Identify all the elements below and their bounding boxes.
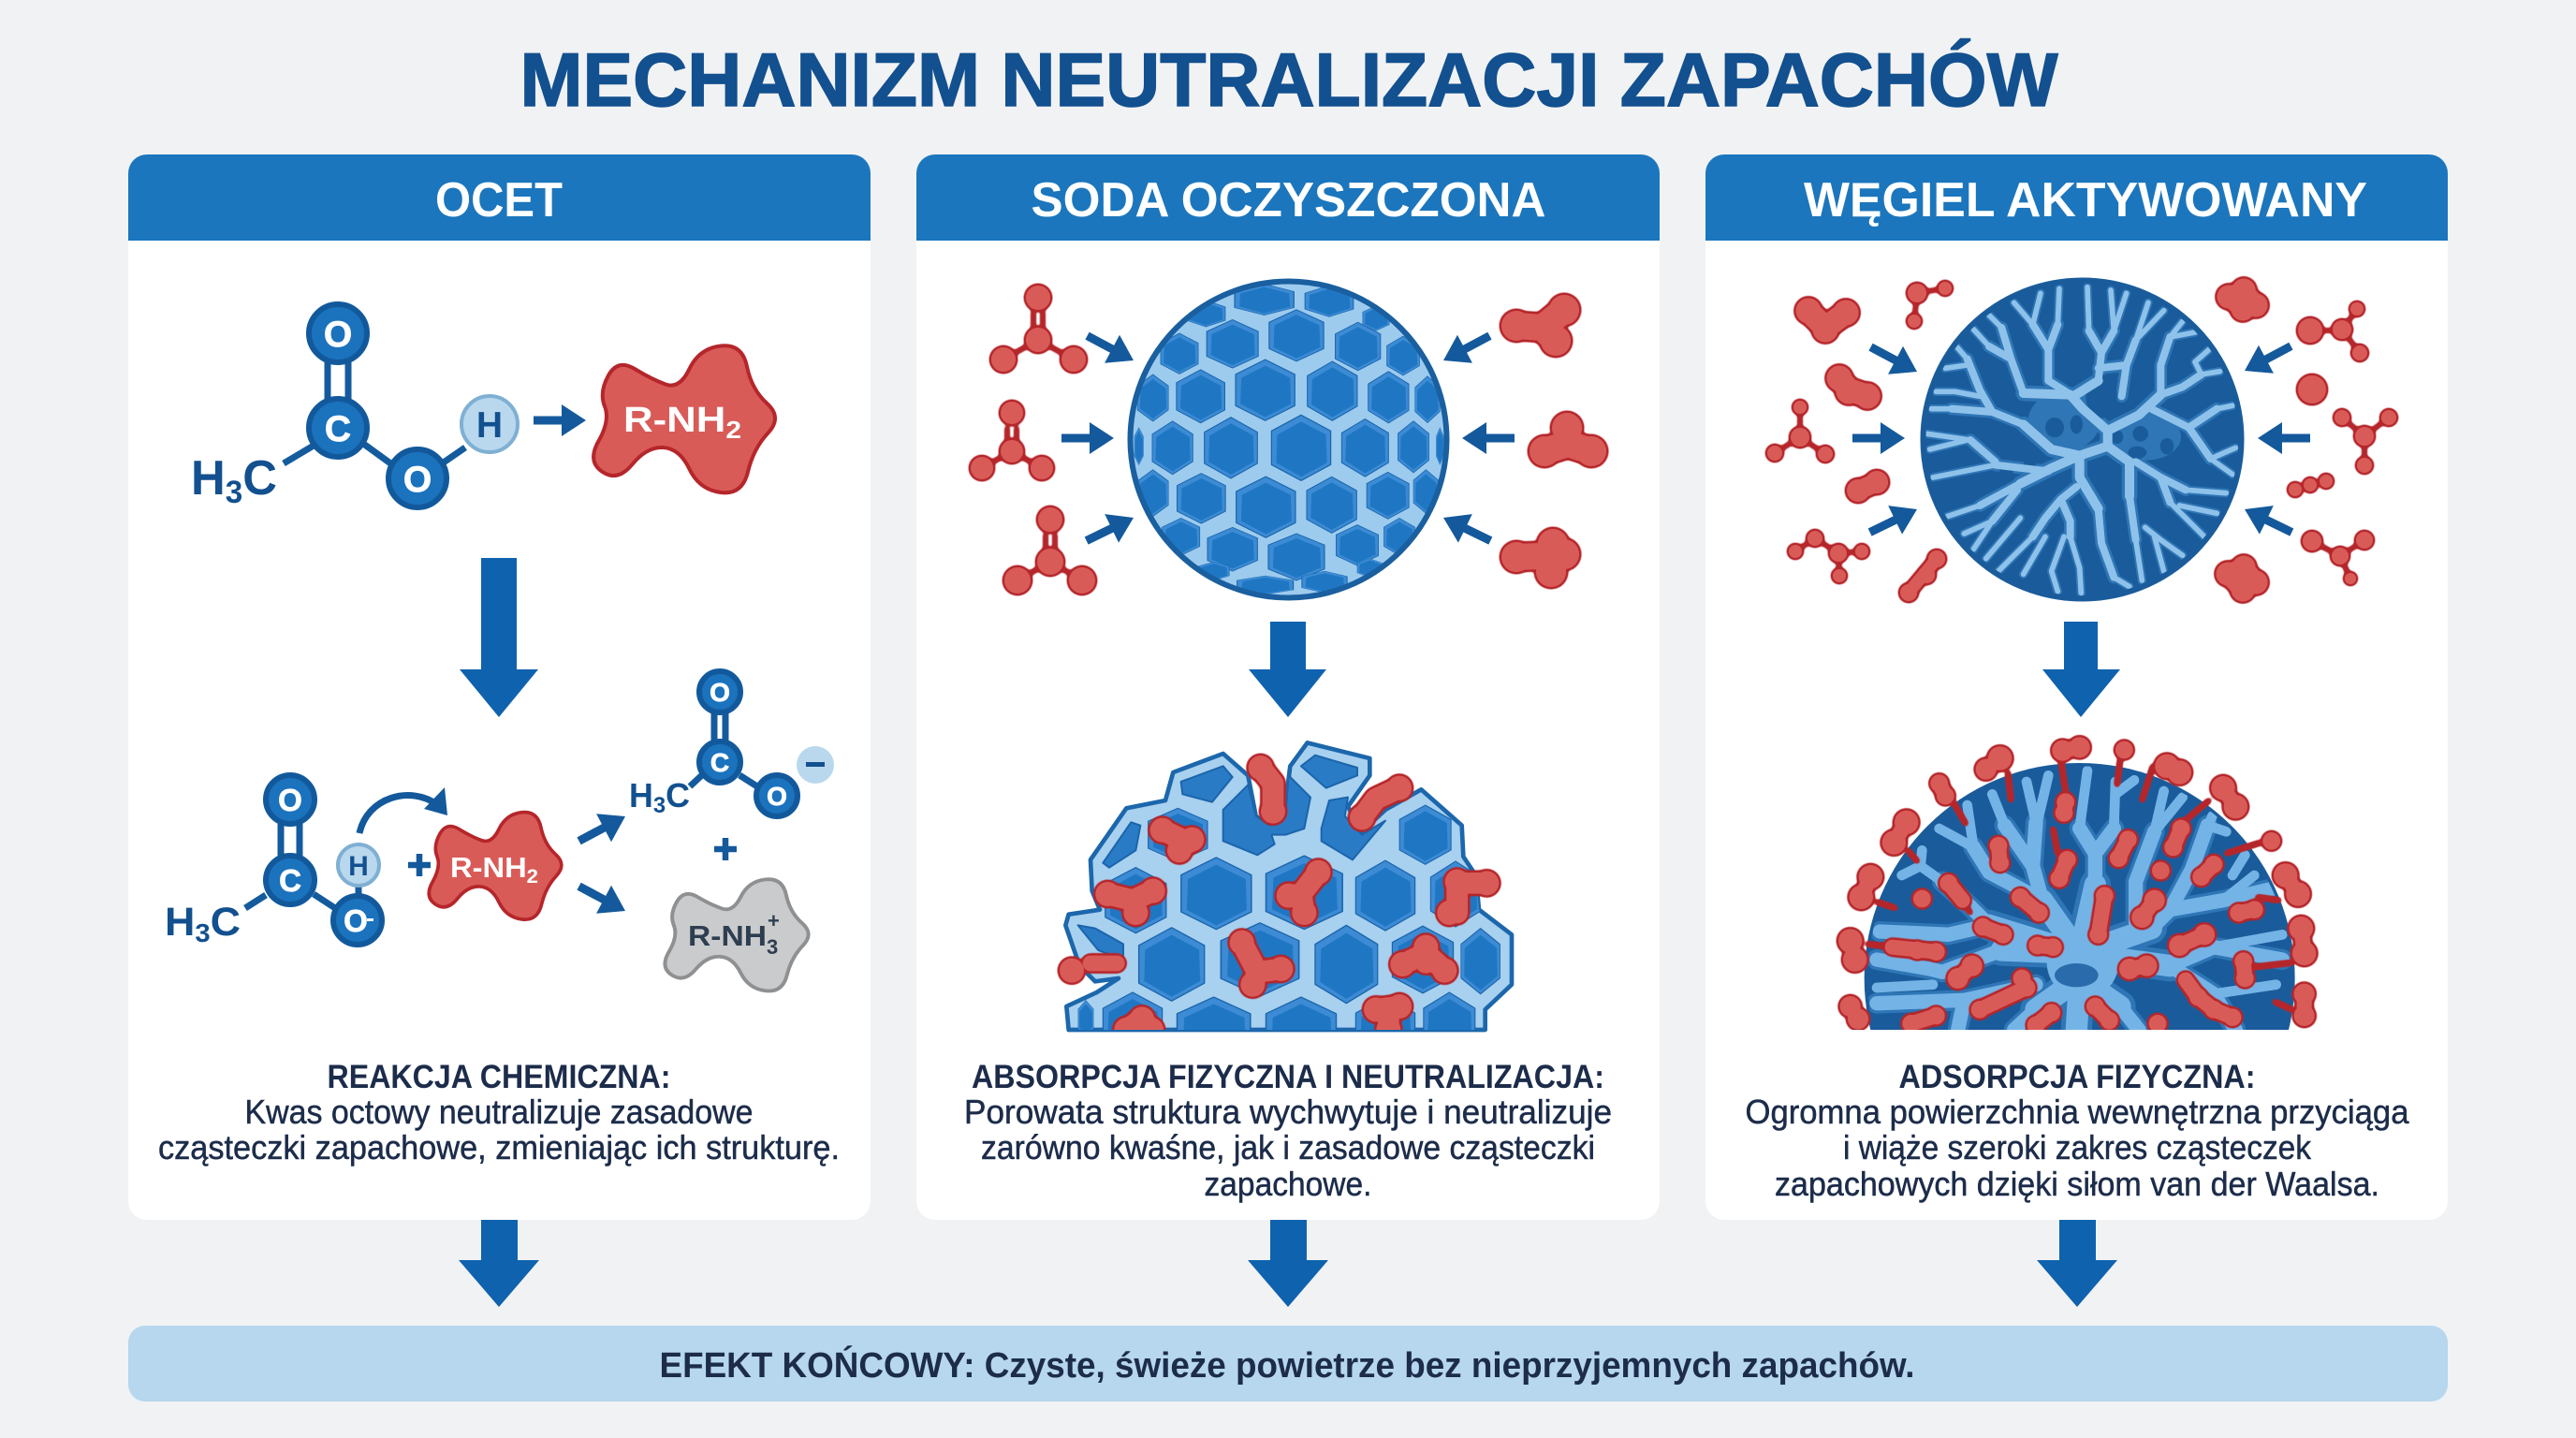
text: adsorpcja	[1745, 1059, 2409, 1203]
final effect bar	[128, 1326, 2448, 1401]
arrow: soda to result	[1248, 1220, 1328, 1307]
panel: wegiel aktywowany	[1705, 154, 2448, 1220]
title: MECHANIZM NEUTRALIZACJI ZAPACHÓW	[520, 37, 2058, 123]
header: wegiel: WĘGIEL AKTYWOWANY	[1804, 173, 2367, 227]
header: soda	[916, 154, 1660, 241]
header: ocet: OCET	[435, 173, 563, 227]
arrow: ocet to result	[459, 1220, 539, 1307]
header: soda: SODA OCZYSZCZONA	[1032, 173, 1546, 227]
arrow: curved proton	[359, 787, 447, 833]
odor molecules left	[971, 286, 1095, 594]
big arrow: down	[1249, 622, 1326, 717]
odor blobs right	[1516, 310, 1591, 572]
molecule: acetate: C	[666, 776, 690, 814]
molecule: acid with proton: H	[348, 851, 369, 882]
blob: R-NH2 reactant: R-NH	[450, 851, 522, 884]
saturated soda section	[1065, 742, 1512, 1065]
molecule: acetic acid: C	[325, 409, 351, 449]
header: ocet	[128, 154, 871, 241]
molecule: acetic acid: H	[191, 451, 227, 506]
blob: R-NH2: 2	[725, 416, 741, 444]
text: reakcja chemiczna: REAKCJA CHEMICZNA:	[328, 1059, 670, 1095]
arrows: toward carbon particle	[1852, 332, 2310, 547]
text: reakcja chemiczna	[158, 1059, 840, 1167]
molecule: acetic acid: O	[324, 315, 352, 355]
molecule: acetic acid: C	[242, 451, 277, 506]
plus sign	[714, 838, 737, 860]
text: absorpcja: zarówno kwaśne, jak i zasadowe cząsteczki	[981, 1128, 1595, 1167]
blob: R-NH2: R-NH	[623, 401, 712, 440]
text: adsorpcja: zapachowych dzięki siłom van der Waalsa.	[1775, 1165, 2379, 1203]
saturated carbon section	[1836, 734, 2320, 1030]
molecule: acid with proton: O	[344, 903, 368, 938]
blob: R-NH2 reactant	[429, 813, 562, 919]
text: absorpcja: Porowata struktura wychwytuje i neutralizuje	[964, 1093, 1612, 1131]
panel: ocet	[128, 154, 871, 1220]
text: adsorpcja: i wiąże szeroki zakres cząsteczek	[1843, 1128, 2312, 1167]
odor molecules around carbon	[1767, 282, 2396, 593]
molecule: acetate: C	[710, 748, 729, 777]
carbon particle: branching pores	[1923, 279, 2243, 599]
blob: R-NH2	[593, 345, 775, 492]
molecule: acetate	[629, 671, 834, 818]
arrow: to ammonium	[572, 873, 633, 925]
big arrow: down	[2042, 622, 2120, 717]
arrows: toward soda particle	[1061, 322, 1515, 555]
molecule: acid with proton: H	[165, 900, 194, 945]
molecule: acid with proton: 3	[195, 918, 211, 947]
trapped odor molecules	[1072, 768, 1486, 1030]
molecule: acetic acid: 3	[226, 475, 242, 510]
text: absorpcja: ABSORPCJA FIZYCZNA I NEUTRALIZACJA:	[972, 1059, 1604, 1095]
blob: R-NH3+	[665, 879, 809, 991]
text: absorpcja: zapachowe.	[1204, 1165, 1372, 1203]
arrow: proton transfer	[534, 404, 586, 436]
molecule: acetate: 3	[653, 793, 666, 818]
soda particle: porous sphere	[1131, 281, 1447, 597]
molecule: acid with proton: C	[279, 863, 301, 898]
text: reakcja chemiczna: Kwas octowy neutralizuje zasadowe	[245, 1093, 753, 1131]
header: wegiel	[1705, 154, 2448, 241]
molecule: acetate: H	[629, 776, 653, 814]
text: adsorpcja: ADSORPCJA FIZYCZNA:	[1898, 1059, 2256, 1095]
blob: R-NH3+: 3	[767, 935, 778, 959]
molecule: acetate: O	[767, 782, 787, 811]
panel: soda oczyszczona	[916, 154, 1660, 1220]
molecule: acid with proton: C	[211, 900, 241, 945]
blob: R-NH3+: +	[768, 909, 780, 932]
adsorbed odor molecules	[1851, 747, 2305, 1025]
molecule: acetic acid: O	[403, 460, 432, 500]
molecule: acid with proton	[165, 775, 382, 947]
blob: R-NH2 reactant: 2	[527, 866, 538, 888]
text: absorpcja	[964, 1059, 1612, 1203]
final effect bar: EFEKT KOŃCOWY: Czyste, świeże powietrze bez nieprzyjemnych zapachów.	[659, 1344, 1915, 1386]
plus sign	[408, 854, 431, 876]
text: reakcja chemiczna: cząsteczki zapachowe, zmieniając ich strukturę.	[158, 1128, 840, 1167]
molecule: acetic acid: H	[476, 405, 503, 446]
molecule: acid with proton: O	[278, 783, 302, 817]
blob: R-NH3+: R-NH	[688, 919, 767, 952]
arrow: wegiel to result	[2037, 1220, 2117, 1307]
big arrow: down	[460, 558, 538, 717]
text: adsorpcja: Ogromna powierzchnia wewnętrzna przyciąga	[1745, 1093, 2409, 1131]
molecule: acetate: O	[710, 678, 730, 707]
molecule: acetic acid	[191, 304, 518, 510]
arrow: to acetate	[572, 802, 633, 855]
